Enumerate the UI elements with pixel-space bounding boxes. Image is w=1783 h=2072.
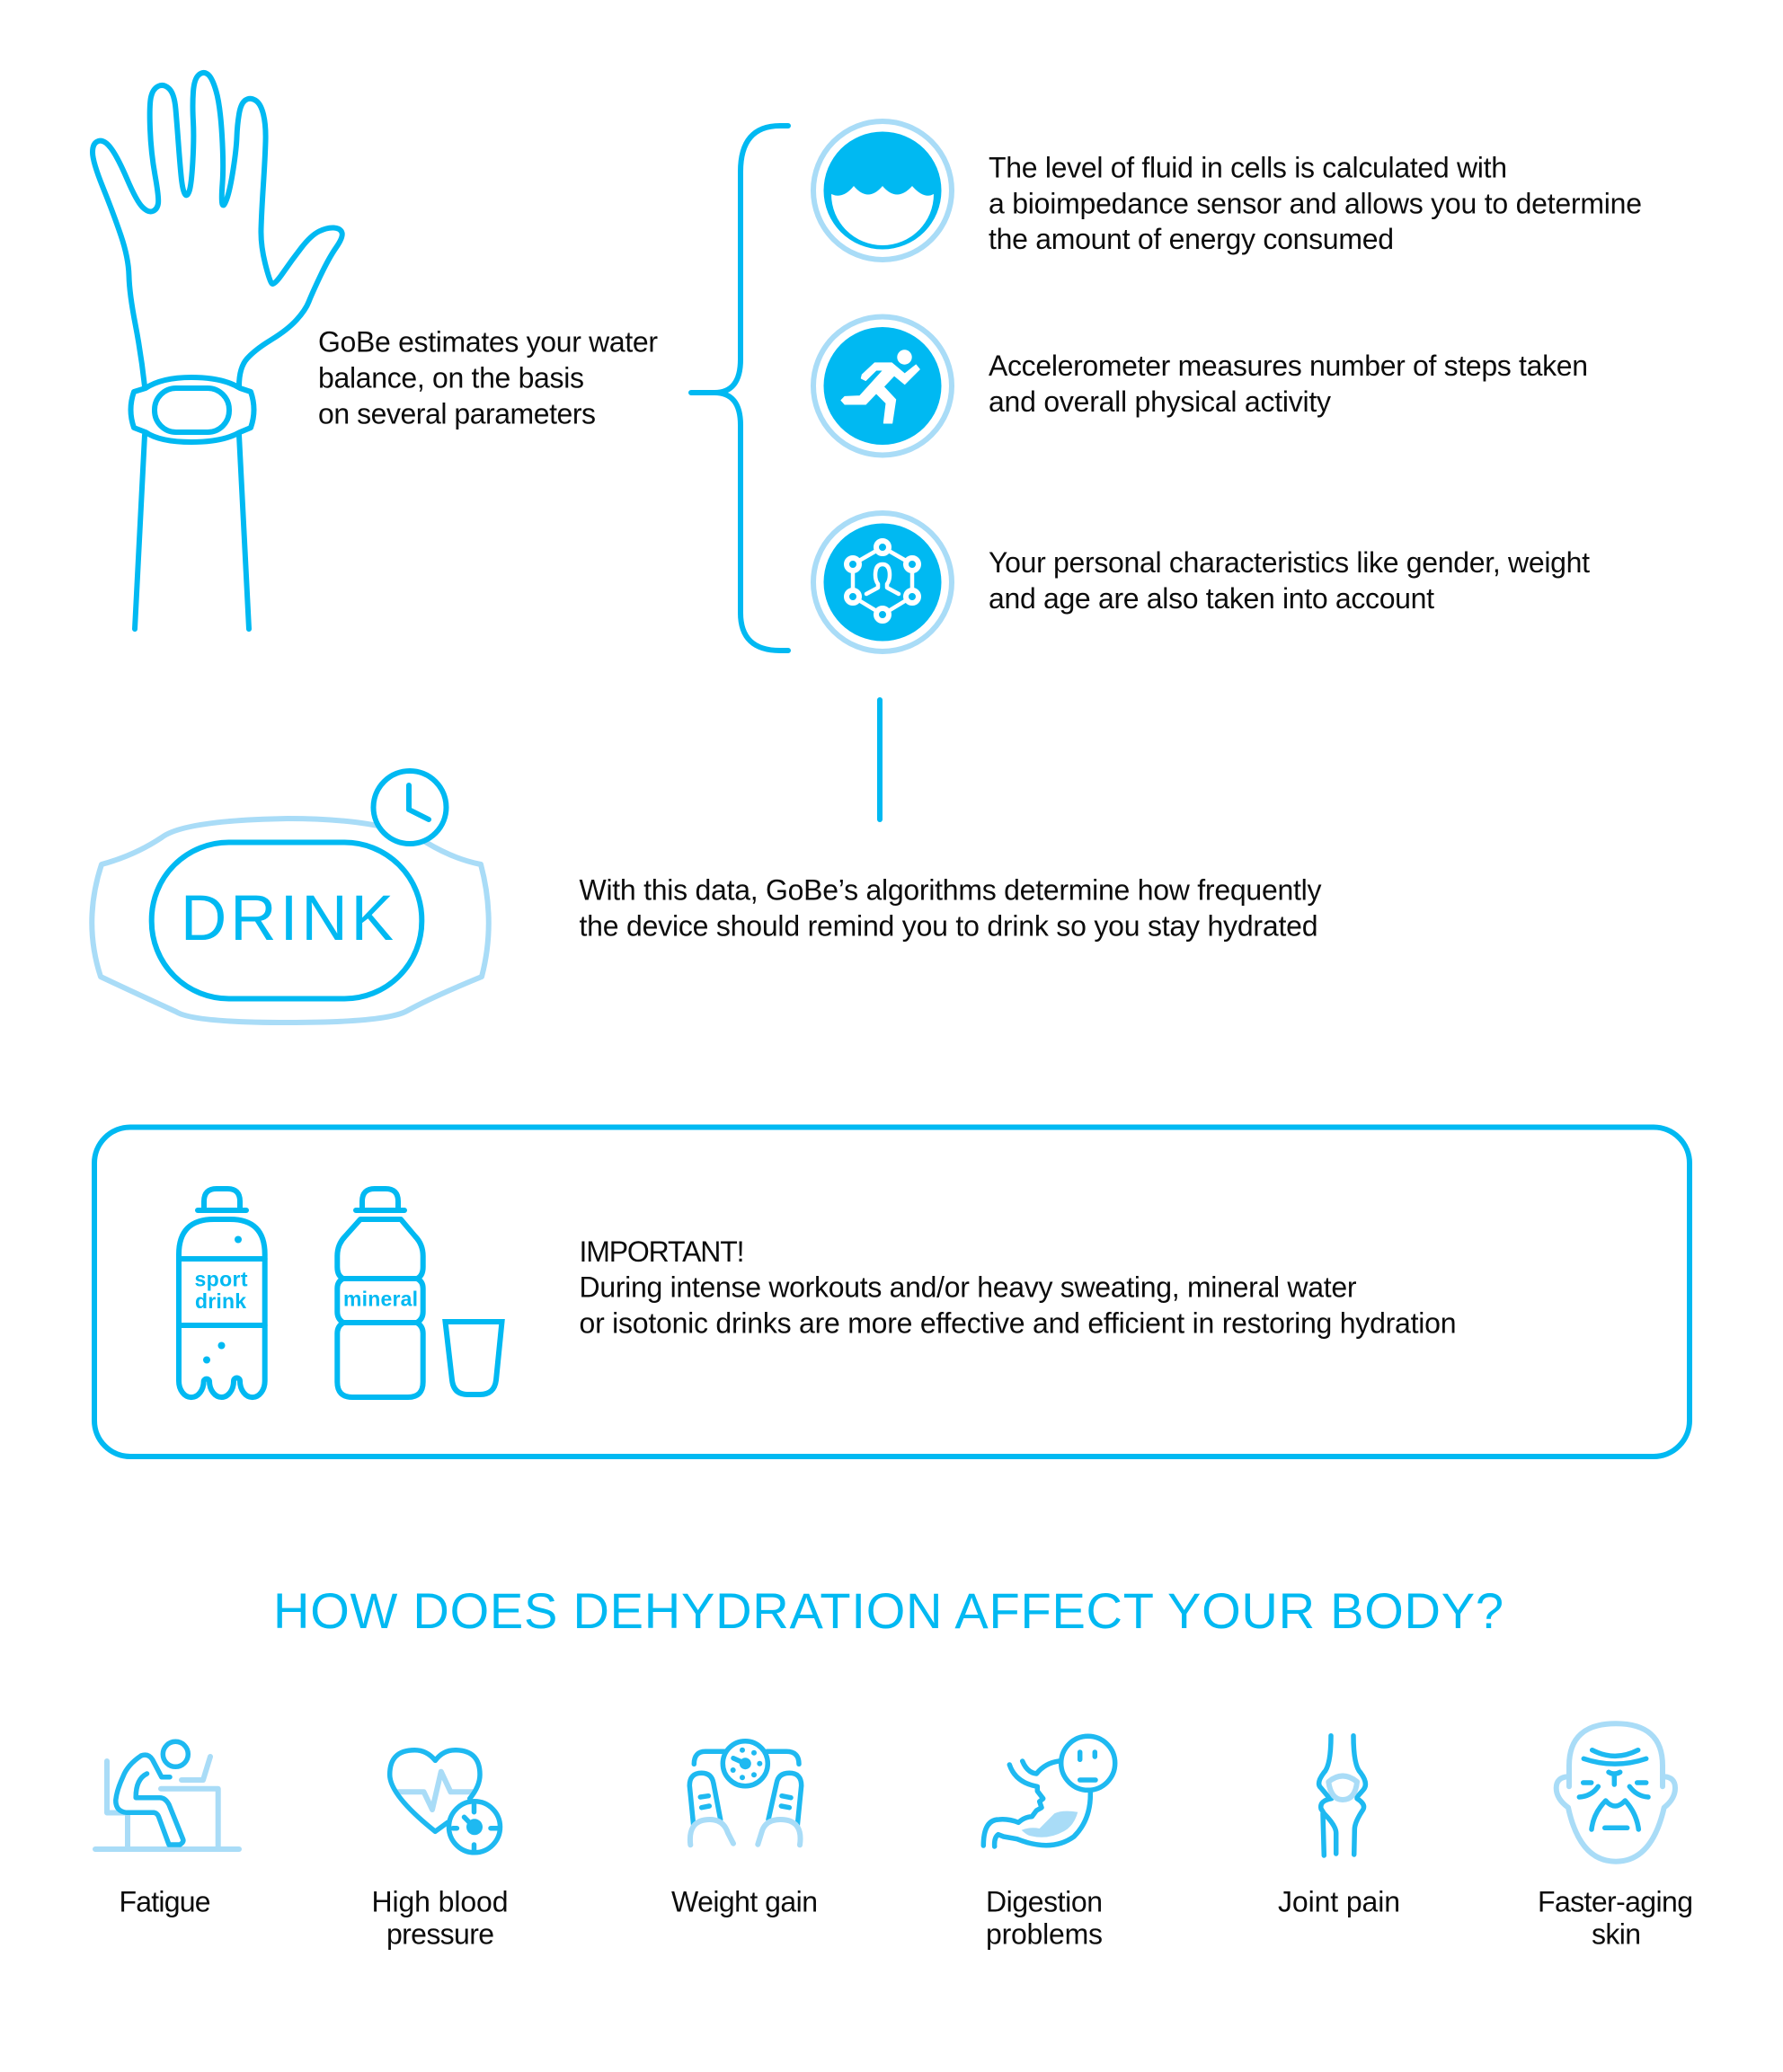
icon: weight gain: [689, 1741, 802, 1845]
icon: sport drink bottle: sport: [194, 1267, 248, 1290]
text: personal characteristics: Your personal characteristics like gender, weight: [989, 546, 1590, 579]
icon: hand with wristband: [93, 73, 342, 629]
text: algorithm reminder: [579, 873, 1321, 942]
label: faster-aging skin: [1538, 1885, 1693, 1950]
text: bioimpedance: a bioimpedance sensor and allows you to determine: [989, 187, 1642, 219]
text: algorithm reminder: With this data, GoBe’s algorithms determine how frequently: [579, 873, 1321, 906]
icon: clock: [374, 771, 446, 844]
text: important note: During intense workouts and/or heavy sweating, mineral water: [579, 1271, 1357, 1303]
label: high blood pressure: [372, 1885, 509, 1950]
text: important note: or isotonic drinks are more effective and efficient in restoring hydration: [579, 1306, 1456, 1339]
brace: [691, 126, 788, 651]
icon: device showing DRINK: [92, 771, 489, 1023]
text: important note: [579, 1235, 1456, 1339]
connector line: [877, 700, 883, 819]
text: accelerometer: and overall physical activity: [989, 385, 1331, 418]
text: accelerometer: [989, 350, 1588, 418]
label: digestion problems: [986, 1885, 1103, 1950]
text: bioimpedance: [989, 151, 1642, 255]
text: important note: IMPORTANT!: [579, 1235, 744, 1268]
icon: sport drink bottle: [179, 1189, 265, 1397]
label: faster-aging skin: skin: [1592, 1917, 1641, 1950]
panel: important: [94, 1127, 1690, 1457]
text: bioimpedance: The level of fluid in cells is calculated with: [989, 151, 1507, 183]
text: personal characteristics: and age are also taken into account: [989, 582, 1434, 615]
text: accelerometer: Accelerometer measures number of steps taken: [989, 350, 1588, 382]
icon: sport drink bottle: drink: [195, 1289, 246, 1313]
label: digestion problems: problems: [986, 1917, 1103, 1950]
label: fatigue: Fatigue: [119, 1885, 210, 1917]
icon: glass: [446, 1322, 501, 1395]
label: weight gain: Weight gain: [671, 1885, 818, 1917]
text: water balance intro: [318, 325, 658, 429]
icon: mineral water bottle: [337, 1189, 423, 1397]
text: personal characteristics: [989, 546, 1590, 615]
icon: device showing DRINK: DRINK: [181, 883, 394, 954]
icon: joint pain: [1319, 1736, 1365, 1855]
icon: aging face: [1557, 1723, 1675, 1862]
label: faster-aging skin: Faster-aging: [1538, 1885, 1693, 1917]
label: high blood pressure: pressure: [386, 1917, 494, 1950]
text: algorithm reminder: the device should remind you to drink so you stay hydrated: [579, 909, 1317, 942]
icon: high blood pressure: [390, 1750, 500, 1853]
icon: fatigue: [95, 1741, 239, 1849]
icon: mineral water bottle: mineral: [343, 1287, 418, 1310]
icon: runner: [813, 316, 952, 455]
icon: digestion problems: [983, 1736, 1115, 1846]
text: water balance intro: balance, on the basis: [318, 361, 584, 394]
text: water balance intro: on several parameters: [318, 397, 596, 429]
label: joint pain: Joint pain: [1278, 1885, 1400, 1917]
icon: water level: [813, 121, 952, 260]
label: digestion problems: Digestion: [986, 1885, 1103, 1917]
heading: HOW DOES DEHYDRATION AFFECT YOUR BODY?: [273, 1582, 1504, 1639]
label: high blood pressure: High blood: [372, 1885, 509, 1917]
icon: personal network: [813, 513, 952, 651]
text: bioimpedance: the amount of energy consumed: [989, 223, 1394, 255]
text: water balance intro: GoBe estimates your water: [318, 325, 658, 358]
